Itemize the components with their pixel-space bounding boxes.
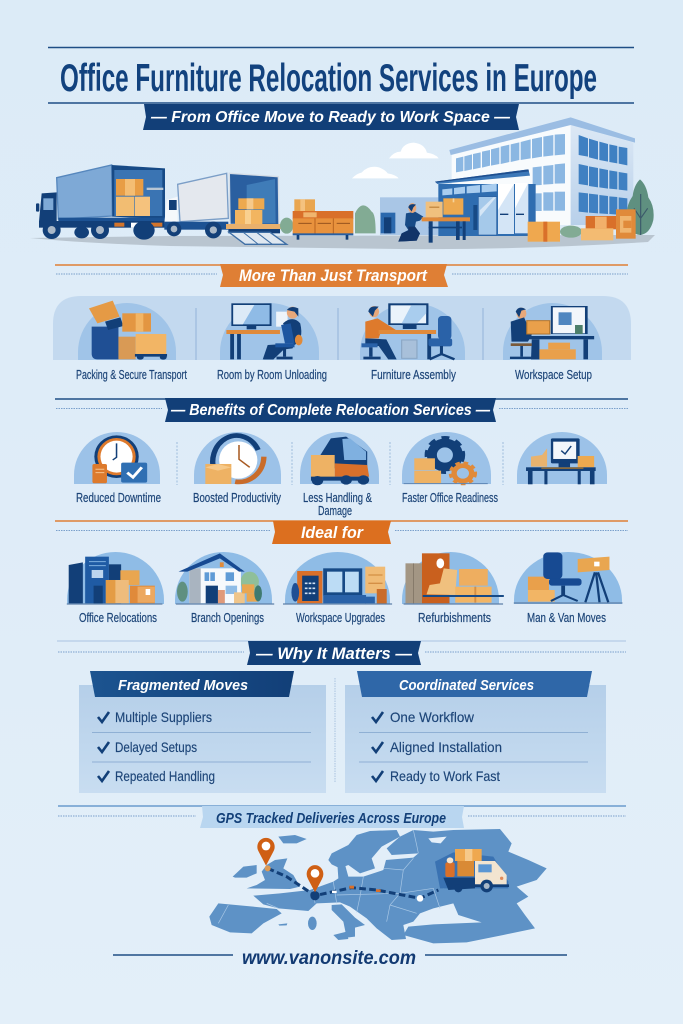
audience labels: Workspace Upgrades (296, 610, 385, 625)
icon: branch openings (176, 553, 274, 604)
panel: coordinated services: One Workflow (390, 709, 475, 725)
section: GPS tracked deliveries (58, 806, 626, 943)
icon: man and van moves (514, 552, 622, 603)
icon: location pin 2 (307, 865, 323, 892)
icon: boosted productivity (205, 436, 264, 484)
worker at table (398, 198, 470, 243)
icon: less handling and damage (311, 437, 369, 485)
orange heading banner: More Than Just Transport (239, 266, 428, 285)
section: Ideal for (55, 521, 628, 625)
benefit labels: Damage (318, 503, 352, 518)
icon: workspace upgrades (283, 567, 392, 604)
truck 1 (36, 165, 165, 240)
navy heading banner: — Benefits of Complete Relocation Services — (170, 402, 491, 419)
icon: reduced downtime (92, 435, 147, 483)
icon: packing and transport (89, 301, 167, 360)
icon: desk with check on monitor (526, 438, 596, 484)
icon: workspace setup (510, 306, 594, 359)
light heading banner (200, 806, 464, 828)
benefit labels (76, 490, 498, 518)
navy heading banner (165, 398, 496, 422)
footer website: www.vanonsite.com (242, 948, 416, 969)
orange heading banner: Ideal for (301, 523, 364, 542)
icon: faster office readiness (404, 438, 488, 484)
audience labels: Office Relocations (79, 610, 157, 625)
panel: fragmented moves (79, 671, 326, 793)
icon: location pin 1 (257, 838, 275, 866)
truck 2 (164, 173, 287, 244)
benefit labels: Less Handling & (303, 490, 372, 505)
section: More Than Just Transport (53, 264, 631, 382)
office building (449, 117, 635, 225)
audience labels: Refurbishments (418, 610, 491, 625)
route line (268, 868, 438, 898)
annex and bushes (380, 197, 582, 238)
service labels: Room by Room Unloading (217, 367, 327, 382)
section: Why It Matters (57, 641, 626, 793)
panel: fragmented moves: Repeated Handling (115, 768, 215, 784)
tree (627, 179, 654, 235)
bushes (280, 205, 376, 234)
benefit labels: Boosted Productivity (193, 490, 281, 505)
map of Europe with route (209, 829, 547, 943)
hero illustration: trucks, furniture, worker and office building (30, 117, 655, 249)
section: Benefits of Complete Relocation Services (55, 398, 628, 518)
orange heading banner (272, 521, 391, 544)
panel: coordinated services: Aligned Installation (390, 739, 502, 755)
panel: coordinated services: Coordinated Services (399, 677, 534, 694)
benefit labels: Faster Office Readiness (402, 490, 498, 505)
entrance (435, 169, 536, 236)
subtitle banner: — From Office Move to Ready to Work Space — (150, 109, 511, 126)
service labels: Furniture Assembly (371, 367, 456, 382)
audience labels: Man & Van Moves (527, 610, 606, 625)
icon: room by room unloading (226, 303, 303, 359)
service labels: Packing & Secure Transport (76, 367, 187, 382)
icon: furniture assembly (361, 303, 454, 359)
navy heading banner: — Why It Matters — (255, 644, 413, 663)
icon: office relocations (67, 557, 162, 604)
light heading banner: GPS Tracked Deliveries Across Europe (216, 810, 446, 827)
clouds (352, 143, 439, 178)
cabinet (293, 199, 353, 240)
icon: delivery truck (435, 849, 509, 892)
service labels: Workspace Setup (515, 367, 592, 382)
benefit labels: Reduced Downtime (76, 490, 161, 505)
foreground boxes (528, 209, 636, 242)
audience labels (79, 610, 606, 625)
icon: refurbishments (404, 553, 504, 604)
panel: coordinated services: Ready to Work Fast (390, 768, 500, 784)
panel: coordinated services (345, 671, 606, 793)
panel: fragmented moves: Fragmented Moves (118, 677, 248, 694)
service labels (76, 367, 592, 382)
panel: fragmented moves: Delayed Setups (115, 739, 197, 755)
ground (30, 235, 655, 249)
header: title and subtitle (48, 48, 634, 130)
panel: fragmented moves: Multiple Suppliers (115, 709, 212, 725)
subtitle banner (143, 104, 519, 130)
service panel (53, 296, 631, 360)
audience labels: Branch Openings (191, 610, 264, 625)
